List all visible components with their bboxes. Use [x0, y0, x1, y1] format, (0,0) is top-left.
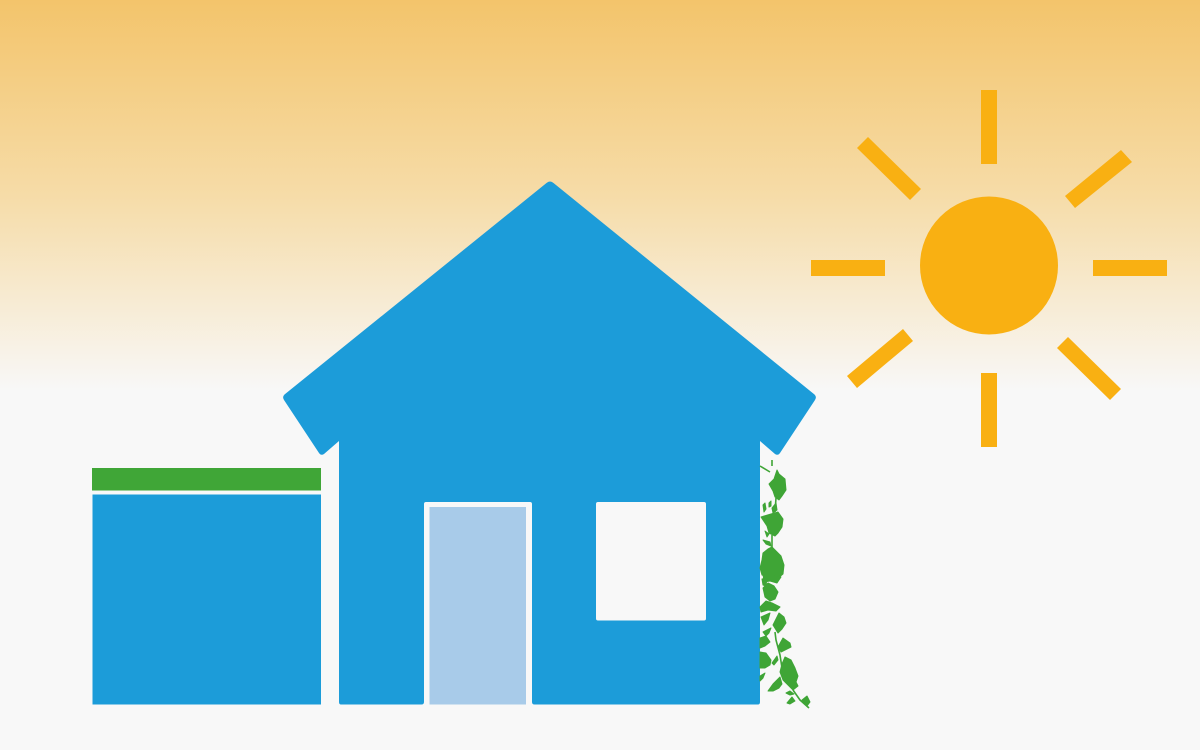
door: [430, 507, 526, 704]
window: [596, 502, 706, 620]
garage green roof: [92, 468, 321, 490]
house: [283, 182, 816, 704]
sky gradient background: [0, 0, 1200, 392]
house body and roof: [283, 182, 816, 704]
sun disc: [920, 196, 1058, 334]
icon: sun: [811, 90, 1167, 447]
vine stem: [760, 460, 809, 708]
vine leaves: [760, 470, 810, 706]
climbing vine: [760, 460, 810, 708]
sun rays: [811, 90, 1167, 447]
garage: [92, 468, 321, 704]
garage body: [92, 494, 321, 704]
